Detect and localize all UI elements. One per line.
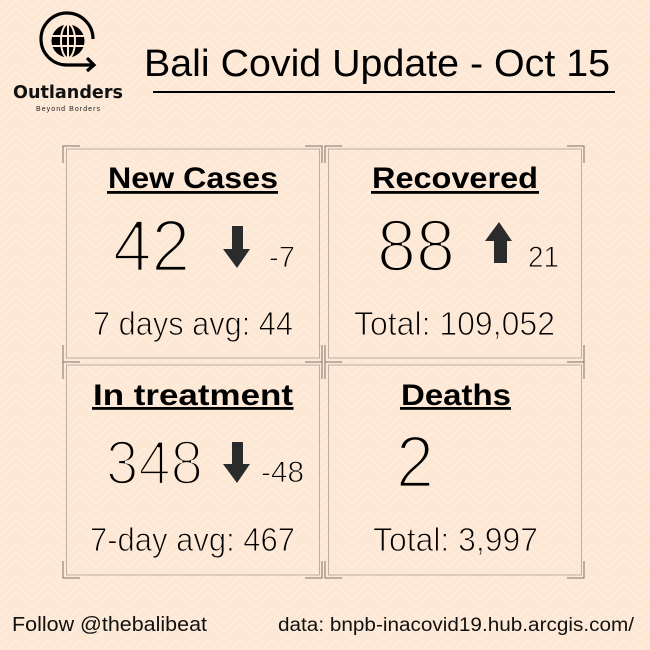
big number: 42: 42 xyxy=(113,206,190,287)
seven day average: 7-day avg: 467 xyxy=(90,521,295,558)
icon: globe with circular arrow xyxy=(41,13,94,71)
panel: Deaths xyxy=(325,362,584,578)
heading: Recovered: Recovered xyxy=(372,162,538,195)
change: -7: -7 xyxy=(269,241,295,274)
icon: down arrow xyxy=(223,442,250,483)
panel: New Cases xyxy=(63,146,322,362)
heading: Deaths: Deaths xyxy=(401,379,511,412)
icon: down arrow xyxy=(223,226,250,268)
panel: Recovered xyxy=(325,146,584,362)
heading: In treatment: In treatment xyxy=(93,379,293,412)
recovered total: Total: 109,052 xyxy=(354,305,555,342)
panel: In treatment xyxy=(63,362,322,578)
seven day average: 7 days avg: 44 xyxy=(93,305,293,342)
panel frame xyxy=(63,146,322,362)
icon: up arrow xyxy=(485,222,512,263)
change: -48: -48 xyxy=(261,456,304,489)
heading: New Cases: New Cases xyxy=(108,162,278,195)
logo wordmark: Outlanders xyxy=(13,83,123,103)
logo: Outlanders xyxy=(13,13,123,113)
deaths total: Total: 3,997 xyxy=(373,521,538,558)
big number: 2: 2 xyxy=(396,422,434,503)
title: Bali Covid Update - Oct 15 xyxy=(144,43,610,85)
change: 21: 21 xyxy=(528,241,559,274)
footer: follow handle: Follow @thebalibeat xyxy=(12,614,207,636)
panel frame xyxy=(325,146,584,362)
panel frame xyxy=(325,362,584,578)
big number: 88: 88 xyxy=(377,206,455,287)
big number: 348: 348 xyxy=(106,429,203,498)
logo tagline: Beyond Borders xyxy=(36,106,100,113)
panel frame xyxy=(63,362,322,578)
footer: data source: data: bnpb-inacovid19.hub.arcgis.com/ xyxy=(278,615,635,636)
